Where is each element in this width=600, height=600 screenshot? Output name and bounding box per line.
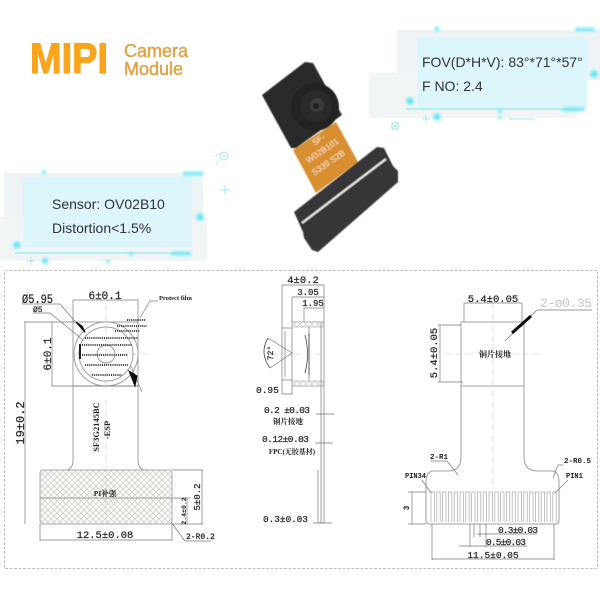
flex cable: W02B101 [304, 136, 341, 165]
product photo: camera module [262, 62, 398, 252]
dimensions: PIN34 [405, 473, 426, 481]
dimensions: 铜片接地 [479, 349, 511, 359]
dimensions: Protect film [159, 295, 192, 302]
dimensions: 11.5±0.05 [467, 550, 519, 561]
dimensions: PI补强 [94, 488, 118, 498]
title: MIPI Camera Module: MIPI [30, 35, 108, 83]
dimensions: 0.95 [256, 385, 279, 396]
dimensions: FPC(无胶基材) [269, 447, 316, 456]
lens circles [74, 320, 147, 386]
connector [294, 147, 398, 252]
dimensions: 19±0.2 [14, 401, 28, 445]
outline [426, 322, 559, 524]
outline [40, 322, 172, 524]
title: MIPI Camera Module [30, 35, 189, 83]
panel: sensor specifications card: Sensor: OV02B10 [52, 196, 165, 212]
panel: lens specifications card: FOV(D*H*V): 83°*71°*57° [422, 54, 583, 70]
dimensions: 0.3±0.03 [263, 514, 308, 525]
dimensions: 0.12±0.03 [262, 434, 309, 445]
title: MIPI Camera Module: Camera [124, 41, 189, 61]
flex cable: S339 S2B [310, 147, 347, 177]
dimensions: 6±0.1 [43, 337, 55, 371]
panel: sensor specifications card: Distortion<1.5% [52, 220, 151, 236]
dimensions: 2-R1 [430, 454, 449, 462]
reinforcement hatch [40, 470, 172, 524]
panel: lens specifications card [369, 27, 600, 129]
dimensions: 4±0.2 [287, 275, 319, 287]
view angle [268, 338, 292, 368]
dimensions: 5.4±0.05 [468, 294, 518, 306]
panel: technical drawing frame [4, 270, 598, 568]
dimensions: 0.3±0.03 [498, 525, 538, 536]
dimensions: 铜片接地 [273, 416, 303, 426]
flex cable [293, 122, 358, 193]
dimensions [403, 294, 592, 561]
dimensions: 5±0.2 [193, 483, 203, 511]
drawing: side view [256, 275, 334, 525]
dimensions: Ø5 [33, 306, 43, 315]
dimensions: 6±0.1 [88, 291, 122, 303]
dimensions [256, 275, 334, 525]
dimensions: 2-ø0.35 [540, 296, 592, 311]
panel: sensor specifications card [0, 152, 230, 265]
dimensions: 1.95 [302, 299, 324, 309]
dimensions: 2-R0.2 [186, 533, 215, 542]
dimensions: 2.4±0.2 [181, 497, 188, 525]
dimensions: 3.05 [297, 288, 319, 298]
dimensions: 5.4±0.05 [429, 328, 441, 378]
dimensions: 0.2 ±0.03 [264, 405, 310, 416]
dimensions: PIN1 [566, 473, 583, 481]
dimensions: 2-R0.5 [564, 458, 592, 466]
contact fingers [431, 492, 556, 522]
dimensions: 0.5±0.03 [486, 537, 526, 548]
dimensions: Ø5.95 [22, 292, 53, 307]
dimensions: 12.5±0.08 [77, 530, 133, 542]
dimensions: -ESP [102, 421, 112, 439]
module profile [272, 322, 328, 523]
drawing: back view [403, 294, 592, 561]
title: MIPI Camera Module: Module [124, 59, 183, 79]
dimensions [14, 291, 215, 542]
flex cable: SF- [310, 131, 327, 147]
camera body and lens [262, 62, 342, 148]
dimensions: SF3G2145BC [91, 402, 101, 452]
dimensions: 3 [403, 505, 412, 510]
dimensions: 72° [267, 346, 276, 360]
drawing: front view [14, 291, 215, 542]
panel: lens specifications card: F NO: 2.4 [422, 78, 483, 94]
